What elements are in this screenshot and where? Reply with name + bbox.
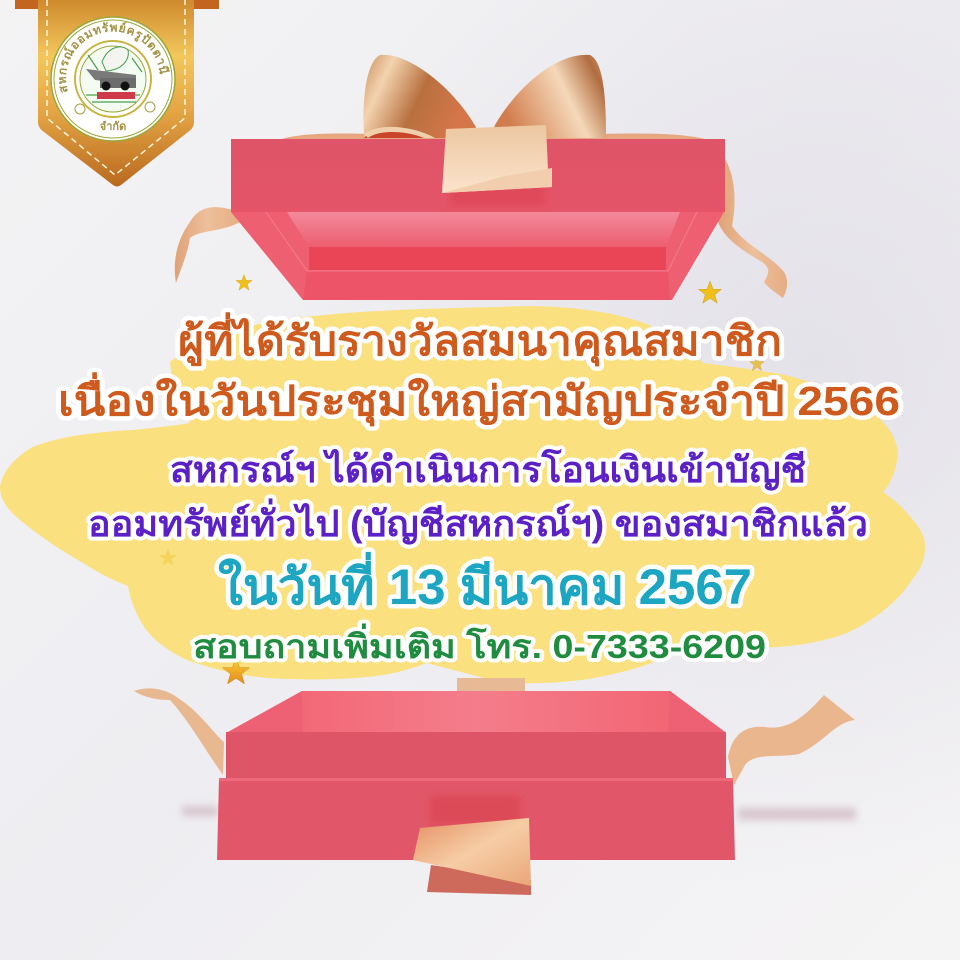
peach ribbon strip above lid xyxy=(282,134,705,139)
ribbon back flap xyxy=(15,0,219,9)
headline text xyxy=(58,312,900,665)
heading line 2: เนื่องในวันประชุมใหญ่สามัญประจำปี 2566 xyxy=(58,372,900,427)
center ribbon behind box xyxy=(457,678,525,692)
cannon xyxy=(86,69,136,85)
heading line 1: ผู้ที่ได้รับรางวัลสมนาคุณสมาชิก xyxy=(178,312,782,367)
ribbon bow left loop xyxy=(364,55,476,138)
ribbon bow left curl xyxy=(364,130,433,138)
seal limited label: จำกัด xyxy=(100,120,126,133)
left top ribbon tail xyxy=(175,207,240,283)
ribbon badge with logo xyxy=(15,0,219,186)
decorative stars xyxy=(159,275,764,684)
icon: top gift box with bow xyxy=(175,55,787,300)
bottom box upper band xyxy=(226,732,726,778)
left shadow xyxy=(182,806,218,816)
lid front xyxy=(231,139,725,212)
lid inner bottom band xyxy=(303,271,670,300)
bottom box interior xyxy=(228,691,725,732)
right bottom ribbon xyxy=(728,695,855,785)
right top ribbon tail xyxy=(718,157,787,298)
lid inner back panel xyxy=(287,212,680,247)
logo seal xyxy=(50,16,176,142)
seal leaf and hill xyxy=(102,47,128,71)
ribbon shadow on box xyxy=(430,795,520,825)
gold ribbon xyxy=(38,0,194,186)
lid inner opening xyxy=(231,212,724,300)
ribbon tape on lid xyxy=(442,125,552,193)
seal name: สหกรณ์ออมทรัพย์ครูปัตตานี xyxy=(59,22,170,93)
seal small emblems xyxy=(75,104,85,114)
seal red brick base xyxy=(97,92,135,99)
contact line: สอบถามเพิ่มเติม โทร. 0-7333-6209 xyxy=(193,623,766,665)
ribbon tab xyxy=(413,818,531,886)
ribbon bow right loop xyxy=(490,55,606,138)
yellow cloud backdrop xyxy=(0,306,925,683)
ribbon tab shadow xyxy=(427,865,531,895)
bottom box base xyxy=(217,778,735,860)
body line 2: ออมทรัพย์ทั่วไป (บัญชีสหกรณ์ฯ) ของสมาชิกแล้ว xyxy=(88,498,868,545)
date line: ในวันที่ 13 มีนาคม 2567 xyxy=(218,552,752,615)
right shadow xyxy=(738,808,856,820)
body line 1: สหกรณ์ฯ ได้ดำเนินการโอนเงินเข้าบัญชี xyxy=(170,448,806,491)
icon: bottom gift box xyxy=(134,678,856,895)
lid inner lower panel xyxy=(309,247,666,270)
shadow below tape xyxy=(450,186,545,206)
left bottom ribbon xyxy=(134,688,224,775)
